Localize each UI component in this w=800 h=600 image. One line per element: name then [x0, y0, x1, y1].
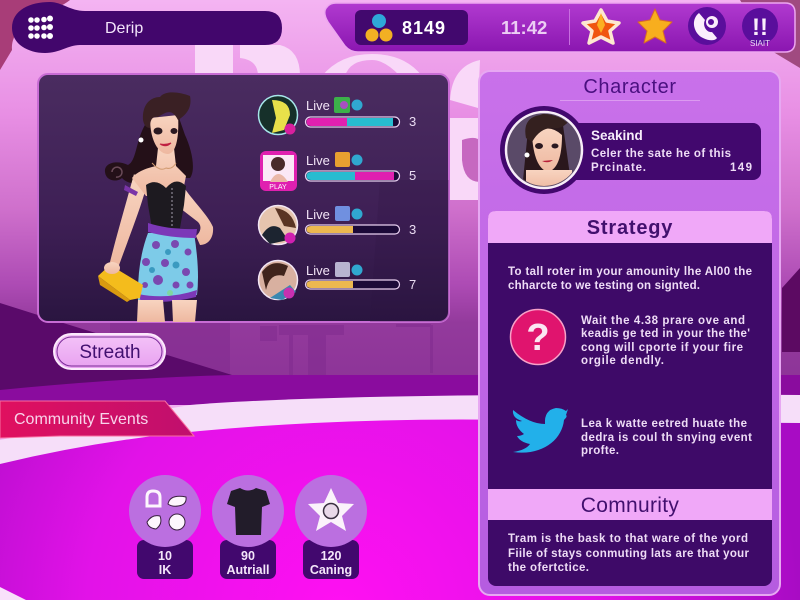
reward 3: Caning	[310, 563, 352, 577]
icon: start button: !!	[752, 14, 768, 41]
icon: question mark	[510, 310, 566, 364]
strategy section	[488, 211, 772, 586]
strategy intro text	[508, 266, 752, 292]
character card	[500, 106, 761, 194]
progress bar	[306, 280, 400, 289]
strategy tip 2: profte.	[581, 445, 619, 457]
player row 2	[260, 151, 416, 191]
badge icons	[335, 206, 362, 221]
streath button: Streath	[79, 342, 141, 363]
icon: start button: SIAIT	[750, 39, 770, 48]
avatar 2: PLAY	[269, 184, 287, 191]
reward 3	[295, 475, 367, 579]
top left title bar: Derip	[105, 20, 143, 37]
progress bar	[306, 171, 400, 181]
player row 2: 5	[409, 168, 416, 183]
community section	[488, 489, 772, 574]
reward 2: 90	[241, 549, 255, 563]
reward 2	[212, 475, 284, 579]
character card: Seakind	[591, 128, 643, 143]
icon: star	[308, 488, 354, 531]
icon: start button	[742, 8, 778, 48]
progress bar	[306, 117, 400, 127]
icon: grid menu	[28, 16, 53, 39]
player row 4: Live	[306, 263, 330, 278]
icon: gold star	[638, 9, 672, 43]
character illustration	[98, 92, 213, 322]
strategy tip 1	[581, 315, 750, 367]
strategy tip 1: keadis ge ted in your the the'	[581, 328, 750, 340]
reward 1: 10	[158, 549, 172, 563]
streath button	[54, 334, 165, 369]
icon: bird	[513, 408, 568, 453]
badge icons	[335, 262, 362, 277]
strategy tip 1: Wait the 4.38 prare ove and	[581, 315, 745, 327]
strategy intro text: chharcte to we testing on signted.	[508, 280, 700, 292]
player row 3: Live	[306, 207, 330, 222]
strategy tip 2: Lea k watte eetred huate the	[581, 418, 747, 430]
coin counter	[355, 10, 468, 45]
community section: Tram is the bask to that ware of the yord	[508, 533, 748, 545]
player row 3	[258, 206, 416, 244]
player row 1: 3	[409, 114, 416, 129]
community section: Comnurity	[581, 494, 679, 517]
timer: 11:42	[501, 17, 547, 38]
avatar 1	[258, 96, 298, 134]
community events banner: Community Events	[14, 411, 148, 428]
strategy intro text: To tall roter im your amounity lhe Al00 the	[508, 266, 752, 278]
badge icons	[334, 97, 362, 113]
strategy tip 2	[581, 418, 752, 457]
reward 1: IK	[159, 563, 171, 577]
top status bar	[325, 3, 795, 52]
character heading: Character	[583, 76, 677, 98]
community section: the ofertctice.	[508, 562, 589, 574]
reward 3: 120	[321, 549, 341, 563]
character card: Celer the sate he of this	[591, 148, 731, 160]
player row 1	[258, 96, 416, 134]
avatar 4	[258, 260, 298, 300]
avatar 3	[258, 206, 298, 244]
badge icons	[335, 152, 362, 167]
icon: question mark: ?	[526, 317, 550, 359]
player row 4	[258, 260, 416, 300]
community section: Fiile of stays conmuting lats are that your	[508, 548, 750, 560]
right panel	[479, 71, 780, 595]
player row 2: Live	[306, 153, 330, 168]
strategy section: Strategy	[587, 217, 673, 239]
icon: t-shirt	[227, 488, 270, 535]
player row 3: 3	[409, 222, 416, 237]
coin counter: 8149	[402, 18, 446, 38]
strategy tip 1: orgile dendly.	[581, 355, 664, 367]
community events banner	[0, 401, 194, 438]
icon: phone button	[688, 7, 726, 45]
strategy tip 2: dedra is coul th snying event	[581, 432, 752, 444]
strategy tip 1: cong will cporte if your fire	[581, 342, 743, 354]
progress bar	[306, 225, 400, 234]
reward 2: Autriall	[226, 563, 270, 577]
icon: orange star	[583, 10, 619, 43]
character card: Prcinate.	[591, 162, 646, 174]
portrait	[522, 112, 572, 190]
main character panel	[38, 74, 449, 322]
player row 1: Live	[306, 98, 330, 113]
character card: 149	[730, 162, 752, 174]
top left title bar	[12, 2, 282, 53]
player row 4: 7	[409, 277, 416, 292]
avatar 2	[260, 151, 297, 191]
reward 1	[129, 475, 201, 579]
icon: four shapes	[147, 491, 186, 530]
